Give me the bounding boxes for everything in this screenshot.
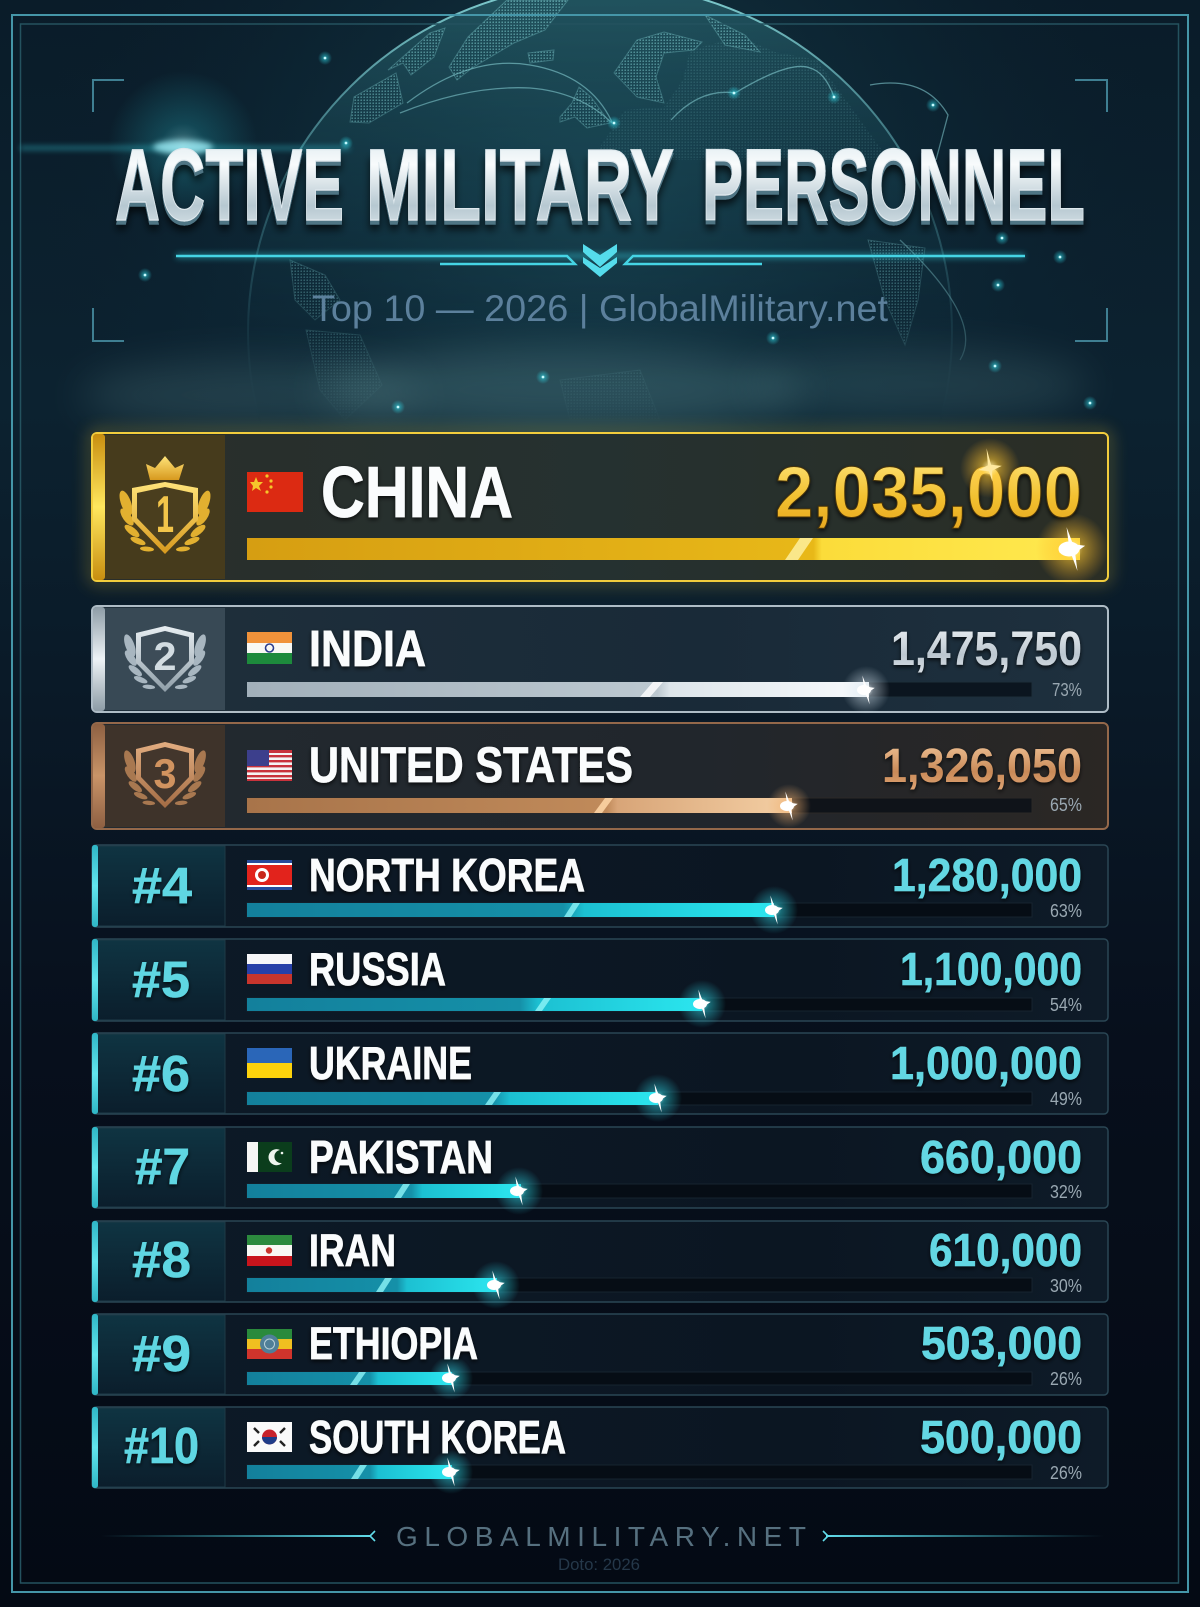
card — [92, 723, 1108, 829]
bar — [247, 903, 774, 917]
bar — [247, 1184, 521, 1198]
card — [92, 433, 1108, 581]
percent: 63% — [1050, 901, 1082, 921]
medal 3: 3 — [154, 750, 176, 797]
rank cell — [105, 608, 225, 710]
bar tip — [634, 1074, 682, 1122]
rank: #9 — [132, 1325, 191, 1382]
footer data note: Doto: 2026 — [558, 1555, 640, 1574]
accent bar — [93, 434, 105, 580]
flag: Iran — [247, 1235, 292, 1266]
flag: United States — [247, 750, 292, 781]
title: ACTIVE — [115, 128, 344, 242]
rank cell — [97, 1408, 225, 1487]
accent bar — [92, 1127, 98, 1208]
row 9: Ethiopia — [92, 1314, 1108, 1400]
bar tip — [495, 1167, 543, 1215]
bar tip — [1036, 513, 1108, 585]
row 3: United States — [92, 723, 1108, 829]
flag: India — [247, 632, 292, 664]
track — [247, 903, 1032, 917]
percent: 73% — [1052, 680, 1082, 700]
medal 2: 2 — [154, 635, 176, 679]
bar tip — [429, 1450, 473, 1494]
rank cell — [97, 1315, 225, 1394]
particles — [138, 51, 1097, 414]
corner brackets — [93, 80, 1107, 341]
row 7: Pakistan — [92, 1127, 1108, 1215]
percent: 65% — [1050, 795, 1082, 815]
accent bar — [92, 1221, 98, 1302]
value: 610,000 — [929, 1224, 1082, 1276]
lens flare — [20, 71, 350, 221]
bar tip — [767, 784, 811, 828]
bar tip — [842, 666, 890, 714]
bar — [247, 1092, 658, 1105]
row 5: Russia — [92, 939, 1108, 1028]
value: 1,280,000 — [892, 849, 1082, 901]
row 6: Ukraine — [92, 1033, 1108, 1122]
name: ETHIOPIA — [309, 1318, 478, 1369]
bar tip — [429, 1356, 473, 1400]
accent bar — [93, 607, 105, 711]
percent: 26% — [1050, 1369, 1082, 1389]
value: 1,326,050 — [882, 740, 1082, 793]
name: NORTH KOREA — [309, 849, 585, 901]
bar — [247, 1372, 452, 1385]
name: INDIA — [309, 620, 426, 677]
medal 2 — [122, 626, 208, 692]
rank: #6 — [132, 1045, 190, 1102]
rank cell — [97, 1034, 225, 1113]
value: 503,000 — [921, 1317, 1082, 1369]
value: 2,035,000 — [775, 453, 1082, 533]
bar — [247, 798, 792, 813]
value: 1,000,000 — [890, 1037, 1082, 1089]
percent: 54% — [1050, 995, 1082, 1015]
percent: 26% — [1050, 1463, 1082, 1483]
rank: #5 — [132, 951, 190, 1008]
rank: #7 — [135, 1138, 190, 1195]
globe with dotted continents — [247, 0, 966, 406]
medal 1: 1 — [156, 486, 174, 544]
rank: #8 — [132, 1231, 191, 1288]
row 4: North Korea — [92, 845, 1108, 934]
rank cell — [97, 1128, 225, 1207]
track — [247, 1372, 1032, 1385]
percent: 32% — [1050, 1182, 1082, 1202]
bar — [247, 998, 702, 1011]
card — [92, 939, 1108, 1021]
card — [92, 1127, 1108, 1208]
subtitle: Top 10 — 2026 | GlobalMilitary.net — [312, 288, 889, 329]
bar — [247, 538, 1080, 560]
rank cell — [105, 435, 225, 579]
bar tip — [750, 886, 798, 934]
rank cell — [97, 940, 225, 1020]
track — [247, 1184, 1032, 1198]
name: SOUTH KOREA — [309, 1411, 566, 1463]
rank cell — [97, 1222, 225, 1301]
flag: China — [247, 472, 303, 512]
flag: Ukraine — [247, 1048, 292, 1078]
flag: Pakistan — [247, 1142, 292, 1172]
value: 1,100,000 — [900, 943, 1082, 995]
medal 1 — [117, 456, 213, 554]
name: CHINA — [321, 453, 513, 533]
accent bar — [93, 724, 105, 828]
name: PAKISTAN — [309, 1131, 493, 1183]
row 2: India — [92, 606, 1108, 714]
card — [92, 845, 1108, 927]
medal 3 — [122, 742, 208, 808]
percent: 49% — [1050, 1089, 1082, 1109]
track — [247, 682, 1032, 697]
flag: Russia — [247, 954, 292, 984]
value: 660,000 — [920, 1131, 1082, 1183]
rank: #4 — [132, 857, 193, 914]
flag: North Korea — [247, 860, 292, 890]
sparkle on value — [960, 438, 1020, 498]
rank cell — [105, 725, 225, 827]
accent bar — [92, 845, 98, 927]
bar — [247, 682, 869, 697]
accent bar — [92, 1033, 98, 1114]
divider with chevron — [176, 244, 1025, 277]
bar — [247, 1465, 452, 1479]
value: 1,475,750 — [891, 623, 1082, 676]
row 8: Iran — [92, 1221, 1108, 1309]
name: IRAN — [309, 1225, 396, 1276]
track — [247, 798, 1032, 813]
bar tip — [472, 1261, 520, 1309]
accent bar — [92, 1407, 98, 1488]
row 10: South Korea — [92, 1407, 1108, 1494]
card — [92, 1221, 1108, 1302]
track — [247, 1278, 1032, 1292]
flag: Ethiopia — [247, 1329, 292, 1359]
card — [92, 1033, 1108, 1114]
name: UKRAINE — [309, 1037, 472, 1089]
name: UNITED STATES — [309, 737, 633, 793]
card — [92, 606, 1108, 712]
track — [247, 1092, 1032, 1105]
accent bar — [92, 939, 98, 1021]
card — [92, 1314, 1108, 1395]
bar tip — [678, 980, 726, 1028]
fog — [80, 348, 1090, 432]
card — [92, 1407, 1108, 1488]
bar — [247, 1278, 497, 1292]
accent bar — [92, 1314, 98, 1395]
rank: #10 — [124, 1417, 199, 1474]
value: 500,000 — [920, 1411, 1082, 1463]
percent: 30% — [1050, 1276, 1082, 1296]
row 1: China — [92, 433, 1108, 585]
footer decorative lines — [101, 1531, 1104, 1541]
title: MILITARY — [366, 128, 674, 242]
track — [247, 1465, 1032, 1479]
footer site name: GLOBALMILITARY.NET — [396, 1521, 806, 1552]
name: RUSSIA — [309, 943, 446, 995]
title — [115, 128, 1085, 242]
flag: South Korea — [247, 1422, 292, 1452]
track — [247, 998, 1032, 1011]
rank cell — [97, 846, 225, 926]
